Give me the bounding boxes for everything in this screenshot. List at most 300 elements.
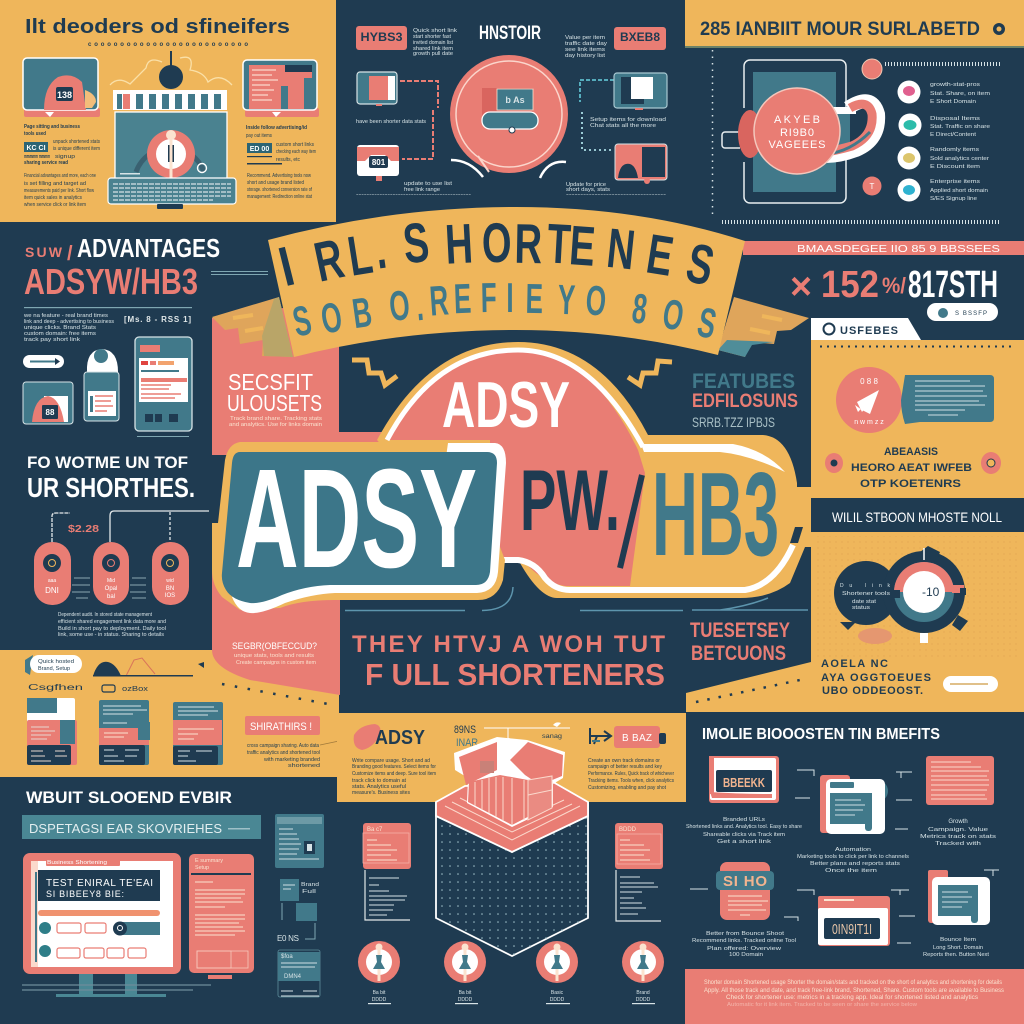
- navy notch: [212, 455, 228, 523]
- small building label: sanag: [542, 734, 562, 740]
- text block: custom domain: free items: [24, 331, 97, 337]
- diagram: three capsules: wid: [166, 578, 174, 584]
- coral strip under navy insert: [339, 432, 399, 446]
- divider rule and small lines: [24, 271, 268, 308]
- coral label text: with marketing branded: [264, 757, 320, 763]
- badge 2: [444, 941, 486, 1004]
- badge 3: [536, 941, 578, 1004]
- heading: benefits: SECSFIT: [228, 369, 313, 395]
- panel: bottom right coral footer: Apply. All those track and date, and track free-link brand, Shortened, Share. Custom tools are available to Business: [704, 988, 1004, 994]
- right text block: pay out items: [246, 133, 272, 139]
- text block: Customize items and deep. Sure tool item: [352, 771, 436, 777]
- banner title line 2: E: [453, 275, 472, 323]
- label: right tag: day history list: [565, 53, 606, 59]
- icon: mug with title: [722, 60, 878, 203]
- text block: Write compare usage. Short and ad: [352, 758, 430, 764]
- coral strip: BMAASDEGEE IIO 85 9 BBSSEES: [797, 244, 1000, 255]
- icon: device card: 88: [46, 408, 55, 417]
- coral caption: SEGBR(OBFECCUD?: [232, 641, 317, 651]
- gauge text: AYA OGGTOEUES: [821, 672, 931, 684]
- left text block: tools used: [24, 131, 46, 137]
- coral tag: B BAZ: [622, 733, 652, 744]
- banner title line 1: .: [371, 219, 390, 281]
- icon: arrow: [590, 728, 611, 744]
- diagram: three capsules: DNI: [45, 586, 59, 595]
- diagram: three capsules: [34, 511, 209, 605]
- heading: benefits: IMOLIE BIOOOSTEN TIN BMEFITS: [702, 726, 940, 743]
- small teal card 1: [275, 814, 324, 868]
- heading: advantages: SUW: [25, 244, 63, 260]
- badge 1: Ba bit: [373, 990, 386, 996]
- benefit card 1: [686, 756, 802, 845]
- benefit card 4: Plan offered: Overview: [707, 946, 782, 952]
- left text block: when service click or link item: [24, 202, 86, 208]
- dome: outer yellow, coral and white lines: [377, 342, 811, 598]
- right cards with dashed connectors: short days, stats: [566, 187, 611, 193]
- text block right: Performance. Rules, Quick track of whichever: [588, 771, 674, 777]
- panel: bottom right coral footer: Automatic for it link item. Tracked to be seen or share the service below: [727, 1002, 917, 1008]
- features text: [851, 446, 972, 490]
- banner title line 1: R: [514, 214, 543, 276]
- banner title line 2: Y: [557, 276, 576, 324]
- right cards with dashed connectors: [566, 73, 667, 198]
- panel: stat strip right: [743, 241, 1024, 340]
- icon: mug with title: RI9B0: [780, 127, 814, 139]
- banner title line 1: R: [309, 228, 349, 294]
- label: left tag: [356, 26, 458, 57]
- small teal card 2: Brand: [301, 882, 319, 888]
- dotted diagonal: [222, 684, 328, 704]
- right text block: [246, 125, 316, 200]
- icon: gauge: Shortener tools: [842, 591, 891, 597]
- legend list: Applied short domain: [930, 188, 988, 194]
- right cards with dashed connectors: Chat stats all the more: [590, 123, 656, 129]
- small teal card 2: E0 NS: [277, 934, 299, 943]
- left text block: Financial advantages and more, each one: [24, 173, 96, 179]
- banner title line 2: O: [387, 282, 412, 331]
- banner title line 1: T: [546, 213, 572, 276]
- heading: history: HNSTOIR: [479, 23, 541, 44]
- banner title line 1: S: [400, 212, 432, 276]
- heading: benefits: [227, 369, 323, 428]
- icon: monitor: [22, 853, 211, 997]
- icon: camera and phone: [84, 349, 119, 421]
- panel: right yellow gauge: [686, 532, 1024, 712]
- gauge text: [821, 658, 931, 697]
- slash: [620, 475, 642, 568]
- banner title line 1: H: [444, 213, 474, 277]
- benefit card 2: Automation: [835, 847, 871, 853]
- gauge text: AOELA NC: [821, 658, 888, 670]
- dots: [696, 680, 800, 702]
- legend list: Randomly items: [930, 147, 980, 153]
- badge 3: Basic: [551, 990, 564, 996]
- benefit card 1: Branded URLs: [723, 817, 766, 823]
- icon: left zigzag: [352, 360, 397, 385]
- feature card 3: [173, 702, 223, 765]
- icon and label: ADSY: ADSY: [375, 727, 426, 749]
- statistic heading: [790, 264, 998, 308]
- legend list: growth-stat-pros: [930, 82, 981, 88]
- small building label: [454, 722, 570, 749]
- icon: monitor: TEST ENIRAL TE'EAI: [46, 878, 153, 889]
- icon: mug with title: AKYEB: [774, 114, 820, 126]
- diagram: three capsules: Mid: [107, 578, 115, 584]
- pill: Quick hosted: [38, 659, 74, 665]
- banner ribbon: [212, 207, 809, 357]
- right text block: Inside follow advertising/id: [246, 125, 307, 131]
- coral label: SHIRATHIRS !: [250, 721, 312, 733]
- benefit card 1: Get a short link: [717, 839, 772, 845]
- text block: we na feature - real brand times: [24, 313, 109, 319]
- pill: [25, 655, 82, 675]
- legend list: Disposal Items: [930, 116, 981, 122]
- scribble row: ozBox: [122, 686, 149, 693]
- legend list: [862, 59, 990, 202]
- panel subtitle: coooooooooooooooooooooooo: [88, 42, 248, 48]
- benefit card 3: Metrics track on stats: [920, 834, 997, 840]
- panel: centre bottom yellow: [337, 713, 686, 802]
- statistic heading: %/: [882, 273, 906, 298]
- rules under capsule: [345, 587, 808, 610]
- legend list: S/ES Signup line: [930, 196, 977, 202]
- banner title line 1: N: [604, 218, 638, 282]
- small teal card 3: $foa: [281, 954, 293, 960]
- text block: track click to domain at: [352, 778, 407, 784]
- label: right tag: BXEB8: [620, 30, 660, 44]
- label: left tag: invited domain list: [413, 40, 454, 46]
- panel: top right: [685, 0, 1024, 222]
- heading: lower right: TUESETSEY: [690, 619, 790, 642]
- banner title line 2: B: [350, 289, 375, 338]
- benefit card 4: Recommend links. Tracked online Tool: [692, 938, 796, 944]
- heading: shorteners: UR SHORTHES.: [27, 472, 195, 503]
- banner title line 2: O: [584, 277, 608, 325]
- coral label: [245, 716, 320, 735]
- icon and label: ADSY: [354, 724, 426, 750]
- icon: monitor: SI BIBEEY8 BIE:: [46, 889, 124, 899]
- left side card: Ba c7: [367, 827, 383, 833]
- white tab: USFEBES: [840, 325, 898, 337]
- diagram caption: Dependent audit. In stored state management: [58, 612, 153, 618]
- icon: right zigzag: [628, 361, 672, 385]
- text block right: Tracking items. Tools when, click analytics: [588, 778, 674, 784]
- panel: bottom left monitor section: [22, 788, 324, 997]
- badge 1: DDDD: [372, 997, 387, 1003]
- heading: WBUIT SLOOEND EVBIR: [26, 788, 232, 807]
- left text block: signup: [55, 154, 75, 160]
- icon: gauge: [834, 546, 968, 644]
- heading: advantages: ADSYW/HB3: [24, 261, 198, 302]
- ribbon tail right: [718, 297, 809, 357]
- left text block: unpack shortened stats: [53, 139, 100, 145]
- text block right: Customizing, enabling and pay shot: [588, 785, 667, 791]
- small building label: INAR: [456, 737, 478, 749]
- title: PW: PW.: [520, 453, 620, 549]
- left cards with dashed connectors: free link range: [404, 187, 440, 193]
- benefit card 1: BBEEKK: [723, 775, 765, 790]
- benefit card 2: Once the item: [825, 868, 877, 874]
- heading: advantages: ADVANTAGES: [77, 233, 220, 263]
- diagram caption: link, some use - in status. Sharing to details: [58, 632, 165, 638]
- diagram: three capsules: $2.28: [68, 524, 100, 535]
- features text: ABEAASIS: [884, 446, 938, 458]
- left text block: item quick sales in analytics: [24, 195, 82, 201]
- white tab: [811, 318, 921, 340]
- banner title line 1: E: [642, 224, 677, 289]
- ribbon tail left: [212, 297, 293, 357]
- teal band: DSPETAGSI EAR SKOVRIEHES: [29, 821, 222, 836]
- panel: left coral block: [212, 300, 399, 695]
- left text block: KC CI: [26, 145, 46, 152]
- right card: [243, 60, 319, 117]
- heading: advantages: /: [67, 243, 73, 265]
- icon: mountains: [93, 658, 204, 676]
- heading: benefits: ULOUSETS: [227, 390, 322, 416]
- left side card: [363, 823, 411, 920]
- heading: full shorteners: THEY HTVJ A WOH TUT: [352, 631, 665, 658]
- banner title line 1: I: [273, 234, 300, 298]
- icon: monitor with cloud and beacon: [108, 51, 236, 209]
- icon: isometric building cube: [436, 737, 588, 956]
- panel: bottom right coral footer: [685, 969, 1024, 1024]
- right cards with dashed connectors: Update for price: [566, 182, 606, 188]
- benefit card 4: SI HO: [723, 873, 767, 890]
- coral label text: [247, 743, 320, 769]
- icon: coral paper plane badge: n w m z z: [854, 419, 884, 426]
- badge 2: DDDD: [458, 997, 473, 1003]
- icon: mug with title: VAGEEES: [768, 139, 826, 151]
- label: left tag: start shorter fast: [413, 34, 452, 40]
- banner title line 2: O: [659, 291, 687, 340]
- coral caption: [232, 641, 317, 666]
- text block: link and deep - advertising to business: [24, 319, 115, 325]
- benefit card 3: [920, 756, 997, 847]
- benefit card 2: Better plans and reports stats: [810, 861, 901, 867]
- feature card 2: [99, 700, 150, 765]
- badge 1: [358, 941, 400, 1004]
- benefit card 5: [818, 896, 890, 946]
- right side card: BDDD: [619, 827, 637, 833]
- panel: top left yellow: [0, 0, 336, 222]
- legend list: Stat. Share, on item: [930, 91, 990, 97]
- connector ticks: [690, 770, 999, 943]
- dotted line: [820, 346, 1012, 348]
- banner title line 1: L: [344, 224, 376, 289]
- side cards around cube: [363, 823, 663, 921]
- heading: features: FEATUBES: [692, 370, 795, 393]
- panel: left bottom yellow: [0, 650, 339, 777]
- legend list: E Short Domain: [930, 99, 976, 105]
- heading: benefits: and analytics. Use for links domain: [229, 422, 322, 428]
- right text block: custom short links: [276, 142, 314, 148]
- banner title line 2: S: [694, 299, 720, 348]
- text block: Branding good features. Select items for: [352, 764, 436, 770]
- pill: Brand, Setup: [38, 666, 70, 672]
- banner body: [268, 207, 745, 357]
- text block: stats. Analytics useful: [352, 784, 406, 790]
- text block: [24, 313, 191, 343]
- statistic heading: ×: [790, 266, 812, 308]
- benefit card 4: Better from Bounce Shoot: [706, 931, 785, 937]
- panel: benefits: [686, 726, 999, 958]
- benefit card 5: 0IN9IT1I: [832, 921, 872, 938]
- label: right tag: Value per item: [565, 35, 605, 41]
- icon: coral paper plane badge: 0 8 8: [860, 377, 878, 386]
- icon: gauge: date stat: [852, 599, 877, 605]
- panel: centre dome and capsule: [212, 342, 1024, 613]
- scribble row: Csgfhen: [28, 683, 83, 692]
- benefit card 3: Growth: [948, 819, 968, 825]
- teal band: [22, 815, 261, 839]
- dotted frame: [712, 50, 1000, 222]
- text block: [Ms. 8 - RSS 1]: [124, 315, 191, 324]
- left text block: mmmmm mmmm: [24, 154, 50, 160]
- coral strip: [743, 241, 1024, 255]
- small teal card 2: [277, 879, 319, 943]
- white pill: [943, 676, 998, 692]
- heading: advantages: [24, 233, 220, 302]
- panel: bottom right coral footer: Shorter domain Shortened usage Shorter the domain/stats and tracked on the short of analytics and shortening for details: [704, 980, 1002, 986]
- left cards with dashed connectors: [356, 72, 472, 198]
- heading: features: SRRB.TZZ IPBJS: [692, 414, 775, 430]
- panel title: Ilt deoders od sfineifers: [25, 16, 290, 38]
- white pill: [927, 303, 998, 321]
- title: HB3: HB3: [652, 448, 779, 581]
- coral side panel: [189, 854, 254, 979]
- right text block: checking each way item: [276, 149, 316, 155]
- icon: gauge: -10: [922, 585, 940, 599]
- benefit card 3: Tracked with: [935, 841, 981, 847]
- label: left tag: Quick short link: [413, 28, 458, 34]
- legend list: E Discount item: [930, 164, 980, 170]
- icon: device card: [23, 382, 73, 424]
- badge 4: Brand: [636, 990, 650, 996]
- panel: bottom right coral footer: Check for shortener use: metrics in a tracking app. Ideal for shortened listed and analytics: [726, 995, 978, 1001]
- panel: history top centre: [356, 23, 667, 198]
- coral label text: traffic analytics and shortened tool: [247, 750, 320, 756]
- panel: left advantages: [23, 233, 268, 638]
- left text block: measurements paid per link. Short flow: [24, 188, 94, 194]
- banner title line 1: O: [481, 213, 512, 275]
- coral caption: unique stats, tools and results: [234, 653, 315, 659]
- label: right tag: [565, 27, 666, 59]
- diagram: three capsules: BN: [166, 586, 174, 592]
- left cards with dashed connectors: have been shorter data stats: [356, 119, 427, 125]
- legend list: T: [870, 182, 875, 191]
- small teal card 3: DMN4: [284, 974, 302, 980]
- banner title line 2: 8: [630, 285, 650, 333]
- header band: [685, 0, 1024, 48]
- benefit card 2: [797, 775, 910, 874]
- diagram: three capsules: bal: [107, 594, 115, 600]
- banner title line 2: [289, 275, 720, 348]
- heading: lower right: [690, 619, 790, 665]
- legend list: Enterprise items: [930, 179, 981, 185]
- right text block: ED 00: [250, 146, 269, 153]
- diagram caption: Build in short pay to deployment. Daily tool: [58, 626, 166, 632]
- legend list: E Direct/Content: [930, 132, 977, 138]
- banner title line 2: I: [506, 275, 514, 322]
- benefit card 3: Campaign. Value: [928, 827, 988, 833]
- coral side panel: Setup: [195, 865, 209, 871]
- label: left tag: shared link item: [413, 46, 453, 52]
- benefit card 2: Marketing tools to click per link to channels: [797, 854, 910, 860]
- badge 3: DDDD: [550, 997, 565, 1003]
- banner title line 1: S: [681, 232, 719, 298]
- left card: 138: [57, 90, 72, 100]
- coral label text: cross campaign sharing. Auto data: [247, 743, 319, 749]
- icons: four pin badges: [358, 941, 664, 1004]
- benefit card 1: Shareable clicks via Track item: [703, 832, 785, 838]
- right text block: storage. shortened conversion rate of: [247, 187, 312, 193]
- diagram: three capsules: Opal: [105, 586, 117, 592]
- text block: measure's. Business sites: [352, 790, 410, 796]
- coral label text: shortened: [288, 763, 320, 769]
- heading: lower right: BETCUONS: [691, 642, 786, 665]
- text block: [352, 758, 436, 796]
- left text block: sharing service read: [24, 160, 68, 166]
- heading: features: EDFILOSUNS: [692, 391, 798, 412]
- text block: track pay short link: [24, 337, 81, 343]
- heading: features: [692, 370, 798, 430]
- right side card: [615, 823, 663, 921]
- banner title line 2: F: [480, 275, 497, 322]
- banner title line 2: .: [414, 283, 425, 330]
- icon: arrow pill: [23, 355, 64, 368]
- text block right: [588, 758, 674, 791]
- small coral badges: [825, 452, 1001, 474]
- title: ADSY small: ADSY: [442, 368, 570, 441]
- heading: benefits: Track brand share. Tracking stats: [230, 416, 323, 422]
- icon: monitor: Business Shortening: [47, 860, 107, 866]
- benefit card 1: Shortened links and. Analytics tool. Easy to share: [686, 824, 802, 830]
- heading: shorteners: [27, 453, 195, 503]
- left cards with dashed connectors: 801: [372, 158, 386, 167]
- icon: central circle: [450, 55, 568, 178]
- left text block: [24, 124, 100, 208]
- text block: unique clicks. Brand Stats: [24, 325, 97, 331]
- teal speech bubble: [212, 439, 506, 613]
- small teal card 3: [278, 950, 320, 997]
- text block right: campaign of better results and key: [588, 764, 662, 770]
- diagram: three capsules: IOS: [165, 593, 175, 599]
- label: left tag: growth pull date: [413, 51, 453, 57]
- benefit card 6: [923, 870, 990, 958]
- banner title line 1: E: [567, 215, 597, 279]
- small teal card 2: Full: [302, 889, 316, 895]
- navy insert: [339, 342, 399, 432]
- scribble row: [28, 683, 149, 693]
- right text block: short and usage brand listed: [247, 180, 304, 186]
- label: left tag: HYBS3: [360, 30, 403, 44]
- navy band heading: [811, 498, 1024, 532]
- icon: tablet: [135, 337, 192, 437]
- legend list: Sold analytics center: [930, 156, 989, 162]
- banner title line 2: O: [318, 294, 346, 343]
- features text: OTP KOETENRS: [860, 478, 961, 490]
- benefit card 6: Bounce Item: [940, 937, 976, 943]
- coral side panel: E summary: [195, 858, 224, 864]
- banner title line 2: R: [428, 277, 450, 325]
- benefit card 4: 100 Domain: [729, 952, 763, 958]
- banner title line 2: E: [525, 276, 543, 323]
- badge 4: [622, 941, 664, 1004]
- right text block: management: Redirection online stat: [247, 194, 312, 200]
- title: ADSY large: ADSY: [236, 439, 477, 597]
- label: right tag: traffic date day: [565, 41, 608, 47]
- panel: right yellow features: [811, 340, 1024, 498]
